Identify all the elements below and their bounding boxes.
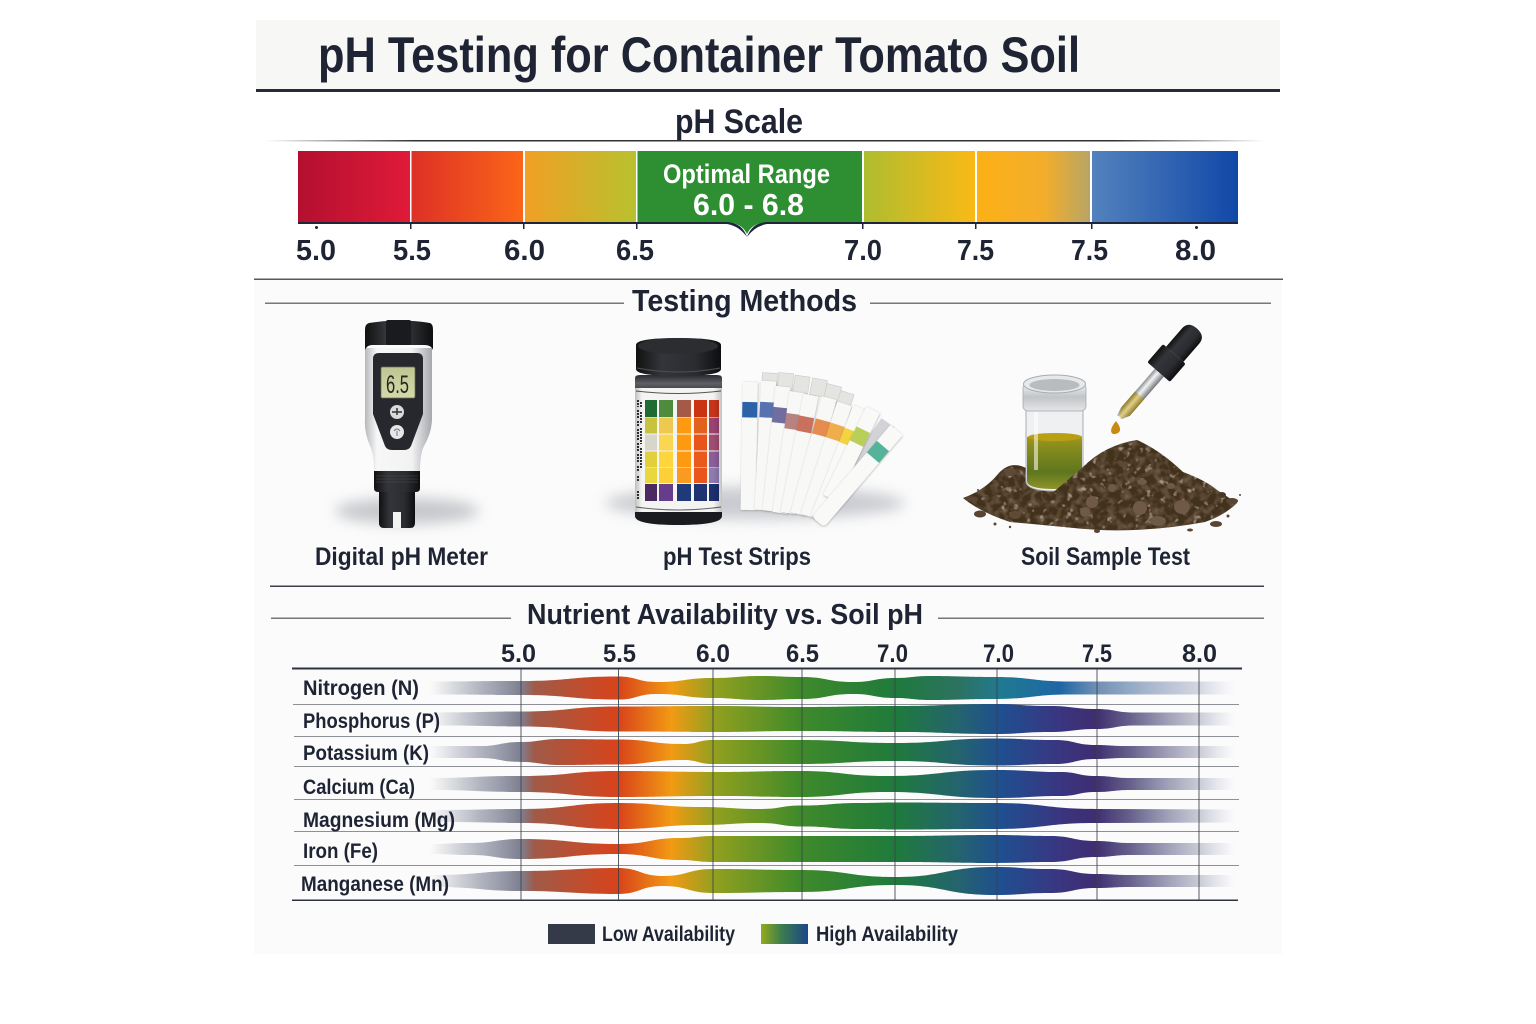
band: magnesium (430, 802, 1235, 830)
icon: dropper with drop (1108, 318, 1208, 434)
band: manganese (430, 867, 1235, 895)
band: nitrogen (430, 676, 1235, 700)
title: pH Testing for Container Tomato Soil (318, 27, 1080, 83)
chart: nutrient availability axis labels: 7.0 (983, 640, 1014, 668)
chart: nutrient row labels: Potassium (K) (303, 742, 429, 765)
chart: pH grid lines (520, 669, 1200, 900)
label: pH Test Strips: pH Test Strips (663, 543, 811, 571)
legend: high availability (761, 923, 958, 946)
chart: nutrient availability bands (430, 676, 1235, 895)
icon: digital pH meter (335, 320, 479, 528)
callout: optimal range: 6.0 - 6.8 (693, 187, 804, 222)
callout: optimal range (663, 159, 830, 222)
pH scale tick labels: 6.5 (616, 235, 654, 267)
band: potassium (430, 738, 1235, 766)
pH scale tick labels: 7.0 (844, 235, 882, 267)
band: iron (430, 835, 1235, 863)
chart: row rules (292, 668, 1242, 901)
pH scale tick labels: 8.0 (1175, 235, 1216, 267)
chart: nutrient row labels (301, 677, 455, 896)
panel: title band (256, 20, 1280, 90)
chart: nutrient availability axis labels: 5.5 (603, 640, 636, 668)
chart: nutrient availability axis labels: 7.0 (877, 640, 908, 668)
panel: lower background (254, 280, 1282, 954)
chart: nutrient row labels: Nitrogen (N) (303, 677, 419, 700)
legend: high availability: High Availability (816, 923, 958, 946)
pH scale tick labels: 6.0 (504, 235, 545, 267)
pH scale tick labels: 7.5 (1071, 235, 1108, 267)
chart: nutrient availability axis labels: 5.0 (501, 640, 536, 668)
heading: Nutrient Availability vs. Soil pH: Nutrient Availability vs. Soil pH (527, 599, 923, 631)
label: Digital pH Meter: Digital pH Meter (315, 543, 488, 571)
label: Soil Sample Test: Soil Sample Test (1021, 543, 1191, 571)
pH scale tick labels: 5.0 (296, 235, 336, 267)
icon: soil mound left (963, 465, 1075, 528)
legend: low availability: Low Availability (602, 923, 735, 946)
icon: pH test strips jar (605, 338, 905, 525)
chart: nutrient row labels: Calcium (Ca) (303, 776, 415, 799)
chart: nutrient availability axis labels: 6.0 (696, 640, 730, 668)
pH scale tick labels: 5.5 (393, 235, 431, 267)
icon: sample vial (1023, 375, 1086, 491)
pH scale tick labels (296, 235, 1216, 267)
icon: digital pH meter: 6.5 (386, 371, 409, 399)
callout: optimal range: Optimal Range (663, 159, 830, 189)
chart: nutrient availability axis labels: 7.5 (1082, 640, 1112, 668)
heading: Testing Methods: Testing Methods (632, 283, 857, 318)
pH scale bar (298, 151, 1238, 237)
legend: low availability (548, 923, 735, 946)
icon: fan of test strips (741, 372, 903, 527)
chart: nutrient row labels: Manganese (Mn) (301, 873, 449, 896)
chart: nutrient row labels: Phosphorus (P) (303, 710, 440, 733)
heading: pH Scale: pH Scale (675, 103, 803, 141)
chart: nutrient row labels: Iron (Fe) (303, 840, 378, 863)
chart: nutrient availability axis labels: 6.5 (786, 640, 819, 668)
icon: soil pile (966, 440, 1241, 533)
pH scale tick labels: 7.5 (957, 235, 994, 267)
chart: nutrient availability axis labels: 8.0 (1182, 640, 1217, 668)
band: calcium (430, 770, 1235, 798)
chart: nutrient availability axis labels (501, 640, 1217, 668)
chart: nutrient row labels: Magnesium (Mg) (303, 809, 455, 832)
band: phosphorus (430, 704, 1235, 734)
